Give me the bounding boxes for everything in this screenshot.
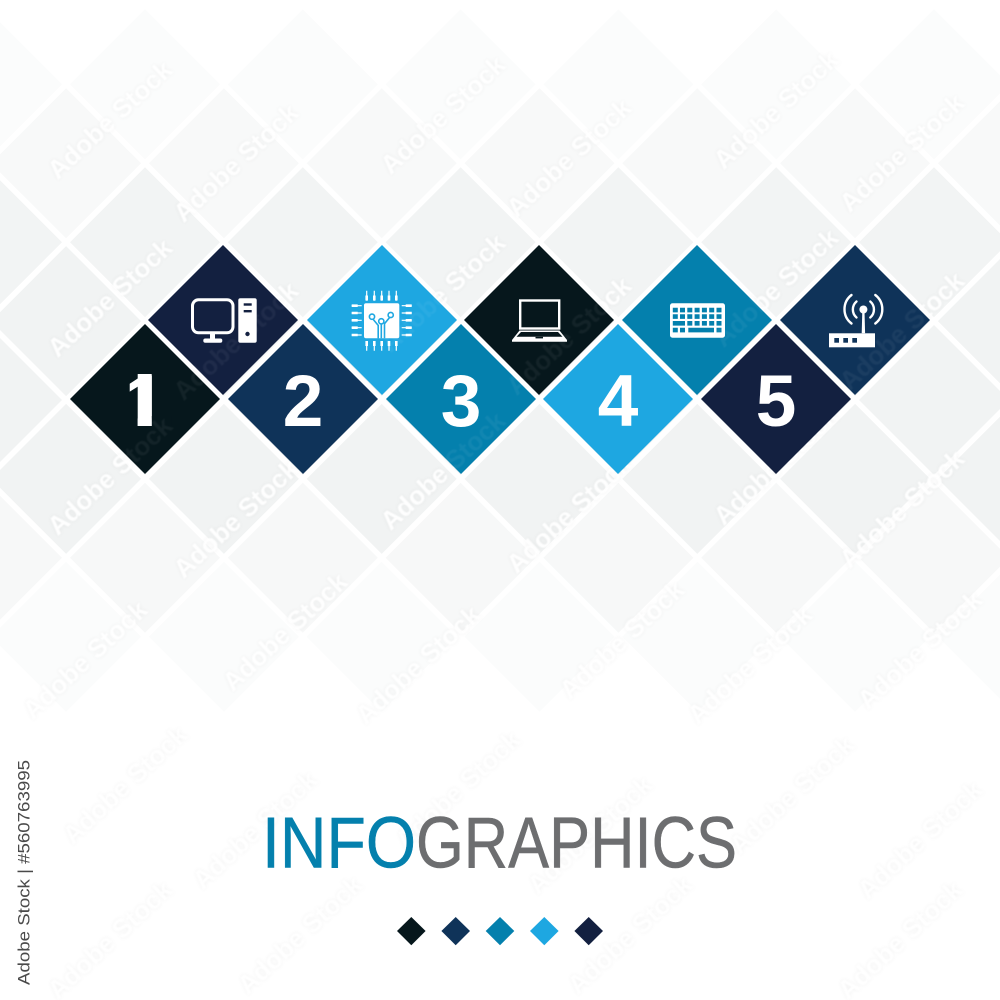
watermark layer: Adobe Stock	[374, 49, 511, 180]
watermark layer: Adobe Stock	[500, 448, 637, 579]
icon tile: processor chip	[307, 245, 457, 395]
watermark layer: Adobe Stock	[833, 443, 970, 574]
watermark layer: Adobe Stock	[349, 599, 486, 730]
watermark layer: Adobe Stock	[167, 453, 304, 584]
step 3 diamond: 3	[441, 361, 481, 442]
watermark layer: Adobe Stock	[216, 566, 353, 697]
icon tile: keyboard	[622, 245, 772, 395]
watermark layer: Adobe Stock	[833, 265, 970, 396]
watermark layer: Adobe Stock	[389, 724, 526, 855]
watermark layer: Adobe Stock	[374, 405, 511, 536]
watermark layer: Adobe Stock	[231, 869, 368, 1000]
watermark layer: Adobe Stock	[167, 275, 304, 406]
step 4 diamond	[543, 324, 693, 474]
colour legend diamonds	[397, 917, 603, 945]
title: INFO	[262, 804, 416, 884]
watermark layer: Adobe Stock	[500, 270, 637, 401]
step 5 diamond	[701, 324, 851, 474]
watermark layer: Adobe Stock	[833, 87, 970, 218]
watermark layer: Adobe Stock	[561, 869, 698, 1000]
watermark layer: Adobe Stock	[500, 92, 637, 223]
faint watermark over tiles: Adobe Stock	[833, 265, 970, 396]
step 2 diamond: 2	[283, 361, 323, 442]
side credit text: Adobe Stock | #560763995	[14, 760, 34, 985]
watermark layer: Adobe Stock	[707, 222, 844, 353]
watermark layer: Adobe Stock	[16, 594, 153, 725]
faint watermark over tiles: Adobe Stock	[707, 222, 844, 353]
watermark layer: Adobe Stock	[41, 410, 178, 541]
step 1 diamond: 1	[125, 361, 165, 442]
faint watermark over tiles: Adobe Stock	[374, 227, 511, 358]
watermark layer: Adobe Stock	[41, 54, 178, 185]
watermark layer: Adobe Stock	[553, 574, 690, 705]
watermark layer: Adobe Stock	[681, 599, 818, 730]
watermark layer: Adobe Stock	[56, 719, 193, 850]
icon tile: laptop	[464, 245, 614, 395]
faint watermark over tiles: Adobe Stock	[500, 270, 637, 401]
watermark layer: Adobe Stock	[851, 774, 988, 905]
watermark layer: Adobe Stock	[374, 227, 511, 358]
title	[262, 804, 737, 884]
watermark layer: Adobe Stock	[521, 769, 658, 900]
faint watermark over tiles: Adobe Stock	[374, 405, 511, 536]
watermark layer: Adobe Stock	[186, 764, 323, 895]
step 5 diamond: 5	[756, 361, 796, 442]
watermark layer: Adobe Stock	[851, 584, 988, 715]
faint watermark over tiles: Adobe Stock	[41, 410, 178, 541]
watermark layer: Adobe Stock	[723, 729, 860, 860]
watermark layer: Adobe Stock	[167, 97, 304, 228]
step 1 diamond	[70, 324, 220, 474]
step 3 diamond	[386, 324, 536, 474]
faint watermark over tiles: Adobe Stock	[167, 275, 304, 406]
watermark layer: Adobe Stock	[41, 232, 178, 363]
icon tile: wifi router	[780, 245, 930, 395]
watermark layer: Adobe Stock	[707, 400, 844, 531]
icon tile: desktop computer	[148, 245, 298, 395]
title: GRAPHICS	[416, 804, 737, 884]
step 2 diamond	[228, 324, 378, 474]
step 4 diamond: 4	[598, 361, 639, 442]
watermark layer: Adobe Stock	[707, 44, 844, 175]
